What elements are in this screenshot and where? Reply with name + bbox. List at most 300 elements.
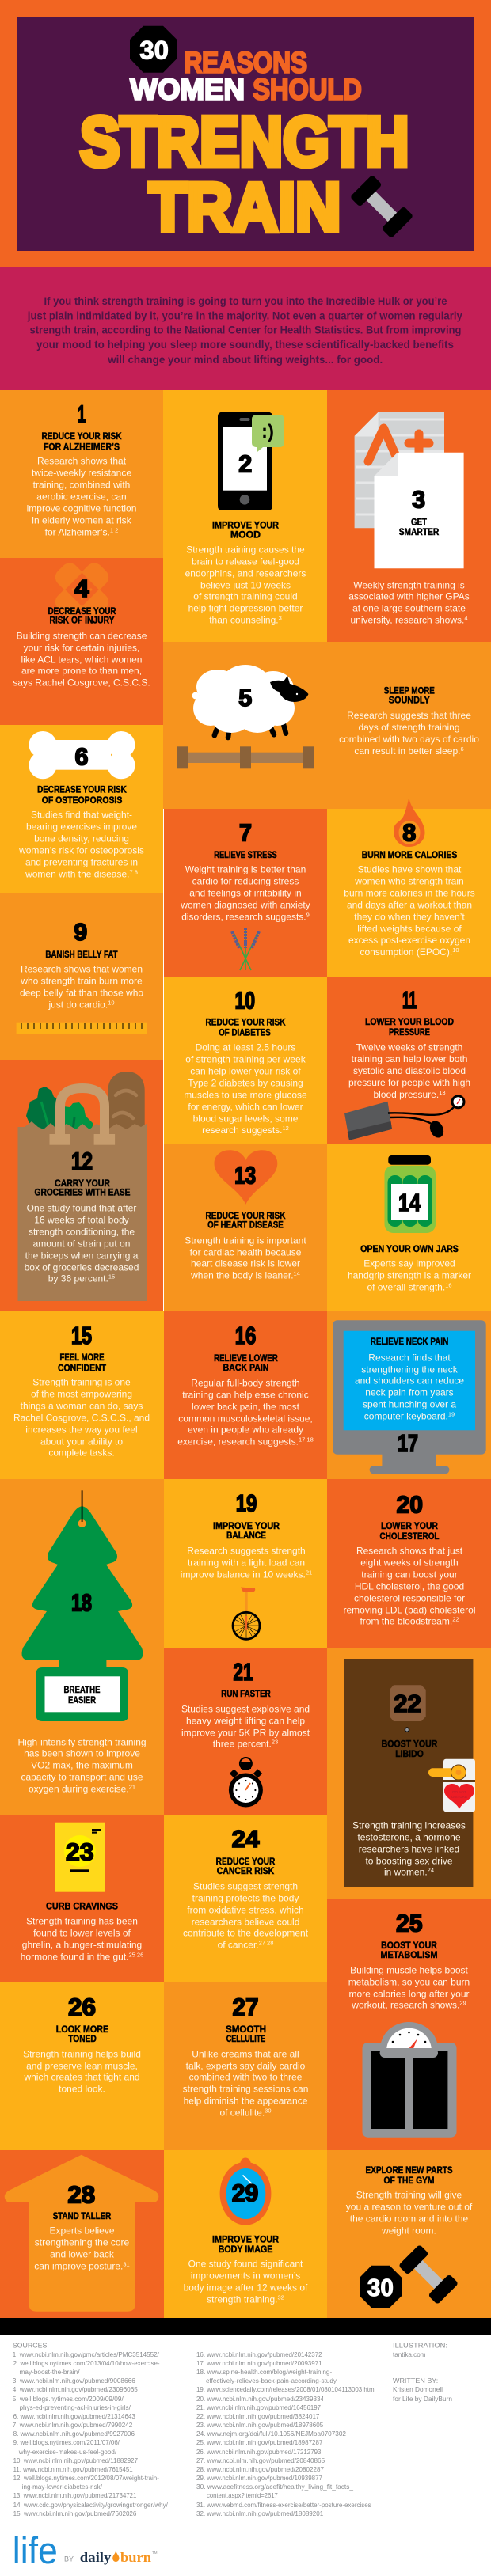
body text: Research suggests that three — [347, 710, 471, 721]
heading: LIBIDO — [395, 1748, 424, 1759]
heading: DECREASE YOUR RISK — [37, 784, 127, 795]
heading — [226, 2024, 266, 2044]
body text: 19 — [448, 1411, 455, 1418]
panel: 15 confident — [0, 1311, 164, 1479]
icon: A+ paper — [355, 412, 464, 568]
body text — [13, 631, 150, 689]
panel: 23 cravings — [0, 1815, 164, 1982]
icon: tree air freshener — [22, 1490, 143, 1721]
body text: more calories long after your — [348, 1989, 470, 2000]
heading — [212, 519, 279, 540]
heading — [37, 784, 127, 806]
sources: column 2 — [196, 2350, 375, 2517]
body text: Research shows that — [37, 456, 127, 467]
body text: burn more calories in the hours — [344, 888, 475, 899]
sources: column 2: 27. www.ncbi.nlm.nih.gov/pubmed/20840865 — [196, 2456, 325, 2464]
body text — [183, 2049, 308, 2119]
sources: column 2: 22. www.ncbi.nlm.nih.gov/pubmed/3824017 — [196, 2412, 320, 2420]
body text: Studies suggest strength — [193, 1881, 298, 1892]
body text: things a woman can do, says — [21, 1401, 143, 1412]
panel: 25 metabolism — [327, 1899, 491, 2150]
sources: column 1: may-boost-the-brain/ — [19, 2368, 80, 2376]
body text: bearing exercises improve — [26, 821, 137, 833]
heading: REDUCE YOUR — [216, 1856, 276, 1867]
body text: Doing at least 2.5 hours — [196, 1042, 295, 1053]
heading: BALANCE — [226, 1530, 266, 1541]
sources: column 2: 29. www.ncbi.nlm.nih.gov/pubmed/10939877 — [196, 2474, 322, 2482]
number 25: 25 — [396, 1910, 423, 1937]
credits: ILLUSTRATION: — [393, 2342, 447, 2350]
body text: Studies find that weight- — [31, 810, 132, 821]
heading: OF THE GYM — [383, 2175, 434, 2186]
body text: Strength training causes the — [186, 544, 305, 556]
sources: column 2: 18. www.spine-health.com/blog/weight-training- — [196, 2368, 332, 2376]
number 15: 15 — [71, 1322, 92, 1349]
body text: at one large southern state — [352, 603, 466, 614]
body text: Strength training has been — [26, 1916, 138, 1927]
title: STRENGTH — [80, 102, 409, 180]
sources: column 1: 11. www.ncbi.nlm.nih.gov/pubmed/7615451 — [13, 2465, 133, 2473]
sources: column 1: why-exercise-makes-us-feel-good/ — [18, 2448, 117, 2456]
body text: aerobic exercise, can — [36, 491, 127, 503]
body text: eight weeks of strength — [360, 1557, 459, 1569]
body text: and days after a workout than — [347, 900, 472, 911]
heading: BACK PAIN — [223, 1362, 268, 1373]
number 13: 13 — [234, 1162, 256, 1189]
body text: 31 — [123, 2261, 130, 2268]
heading: REDUCE YOUR RISK — [41, 431, 122, 442]
heading: DECREASE YOUR — [48, 605, 116, 616]
body text: computer keyboard. — [364, 1411, 448, 1422]
heading: CELLULITE — [226, 2033, 265, 2044]
logo: life by daily burn: BY — [64, 2555, 74, 2563]
body text: lower back pain, the most — [192, 1402, 300, 1413]
body text: disorders, research suggests. — [181, 912, 306, 923]
heading: BOOST YOUR — [382, 1739, 438, 1750]
body text: 30 — [265, 2107, 272, 2115]
body text: 6 — [460, 745, 464, 753]
icon: 30 weight plate: 30 — [139, 36, 169, 65]
body text: 13 — [439, 1089, 446, 1096]
panel: 18 breathe — [0, 1479, 164, 1815]
body text: and shoulders can reduce — [355, 1375, 464, 1387]
heading — [380, 1520, 439, 1542]
number 21: 21 — [233, 1658, 253, 1686]
sources: column 1: 12. well.blogs.nytimes.com/2012/08/07/weight-train- — [13, 2474, 159, 2482]
number 1: 1 — [78, 400, 86, 427]
body text: training can boost your — [361, 1569, 458, 1580]
sources: column 1: 5. well.blogs.nytimes.com/2009/09/09/ — [13, 2395, 124, 2403]
logo: life by daily burn: burn — [120, 2550, 152, 2565]
body text: Twelve weeks of strength — [356, 1042, 462, 1053]
body text: heart disease risk is lower — [191, 1258, 300, 1269]
panel: 30 explore — [327, 2150, 491, 2318]
body text — [23, 2049, 141, 2095]
heading — [56, 2024, 108, 2044]
heading — [366, 2164, 453, 2186]
body text: Research suggests strength — [187, 1546, 306, 1557]
body text: women diagnosed with anxiety — [180, 900, 310, 911]
body text: in elderly women at risk — [32, 515, 132, 526]
sources: column 1 — [13, 2342, 168, 2517]
credits: WRITTEN BY: — [393, 2377, 438, 2384]
body text — [348, 580, 470, 626]
body text: workout, research shows. — [352, 2000, 459, 2011]
sources: column 1: 4. www.ncbi.nlm.nih.gov/pubmed/23096065 — [13, 2385, 138, 2393]
body text: twice-weekly resistance — [32, 468, 131, 479]
body text — [348, 1042, 470, 1100]
sources: column 1: 3. www.ncbi.nlm.nih.gov/pubmed/9008666 — [13, 2377, 135, 2384]
heading: RELIEVE STRESS — [214, 849, 277, 860]
panel: 12 groceries — [0, 1060, 163, 1311]
icon: door: DO NOT — [452, 1790, 466, 1794]
icon: door: DISTURB — [451, 1795, 467, 1799]
number 19: 19 — [236, 1489, 257, 1517]
sources: column 2: 28. www.ncbi.nlm.nih.gov/pubmed/20802287 — [196, 2465, 324, 2473]
panel: 14 jars — [327, 1144, 491, 1311]
body text: like ACL tears, which women — [21, 654, 142, 666]
body text: by 36 percent. — [48, 1273, 108, 1284]
body text: of strength training per week — [185, 1054, 306, 1065]
icon: 30 weight plate: 30 — [367, 2274, 394, 2301]
panel: 7 stress — [164, 809, 327, 977]
body text: neck pain from years — [365, 1387, 454, 1398]
body text: the biceps when carrying a — [25, 1250, 139, 1261]
number 9: 9 — [74, 918, 87, 946]
heading: CURB CRAVINGS — [46, 1901, 118, 1912]
icon: blood pressure cuff — [344, 1095, 466, 1140]
number 14: 14 — [398, 1189, 421, 1216]
icon: pickle jar — [385, 1155, 436, 1233]
panel: 8 calories — [327, 797, 491, 977]
heading: PRESSURE — [389, 1026, 430, 1038]
intro text: will change your mind about lifting weights... for good. — [107, 353, 383, 366]
heading — [63, 1684, 100, 1705]
body text: Unlike creams that are all — [192, 2049, 299, 2060]
panel: 9 belly fat — [0, 893, 163, 1060]
heading: MOOD — [230, 529, 261, 540]
heading: RELIEVE LOWER — [214, 1352, 278, 1364]
body text: deep belly fat than those who — [20, 988, 143, 999]
body text: when the body is leaner. — [191, 1270, 294, 1281]
heading: BURN MORE CALORIES — [362, 849, 457, 860]
credits — [393, 2342, 452, 2403]
body text: Research finds that — [368, 1352, 451, 1364]
intro text — [27, 294, 462, 366]
body text: 10 — [108, 1000, 115, 1007]
sources: column 2: 25. www.ncbi.nlm.nih.gov/pubmed/18987287 — [196, 2438, 323, 2446]
body text: can improve posture. — [34, 2261, 123, 2272]
heading — [48, 605, 116, 626]
sources: column 1: 6. www.ncbi.nlm.nih.gov/pubmed/21314643 — [13, 2412, 135, 2420]
body text: excess post-exercise oxygen — [348, 935, 470, 946]
number 16: 16 — [235, 1322, 256, 1349]
sources: column 2: 17. www.ncbi.nlm.nih.gov/pubmed/20093971 — [196, 2359, 322, 2367]
body text: and preserve lean muscle, — [26, 2061, 138, 2072]
icon: dumbbell — [350, 175, 413, 238]
heading: OF DIABETES — [219, 1027, 271, 1038]
panel: 6 osteoporosis — [0, 725, 163, 893]
body text: training, combined with — [33, 480, 130, 491]
intro panel — [0, 267, 491, 390]
footer band — [0, 2318, 491, 2335]
body text: bone density, reducing — [34, 833, 129, 844]
body text: Studies have shown that — [358, 864, 462, 875]
body text: combined with two to three — [189, 2072, 303, 2083]
body text — [13, 1377, 150, 1459]
logo: life by daily burn: life — [13, 2529, 58, 2571]
heading: FEEL MORE — [60, 1352, 105, 1363]
sources: column 2: 24. www.nejm.org/doi/full/10.1056/NEJMoa0707302 — [196, 2430, 346, 2438]
heading — [365, 1016, 454, 1038]
body text: 17 18 — [299, 1436, 314, 1444]
body text: exercise, research suggests. — [177, 1436, 299, 1447]
number 5: 5 — [238, 684, 252, 711]
sources: column 1: SOURCES: — [13, 2342, 49, 2350]
heading: GET — [411, 516, 428, 527]
heading: OF HEART DISEASE — [207, 1220, 284, 1231]
body text: are more prone to than men, — [21, 666, 142, 677]
body text: Strength training is one — [32, 1377, 131, 1388]
heading: CHOLESTEROL — [380, 1531, 439, 1542]
body text: complete tasks. — [48, 1447, 115, 1459]
body text: toned look. — [59, 2084, 105, 2095]
body text: strengthening the neck — [361, 1364, 459, 1375]
body text: from the bloodstream. — [360, 1616, 452, 1627]
sources: column 1: 8. www.ncbi.nlm.nih.gov/pubmed/9927006 — [13, 2430, 135, 2438]
body text — [344, 864, 475, 958]
body text: spent hunching over a — [363, 1399, 456, 1410]
heading: SMARTER — [399, 526, 440, 537]
panel: 3 smarter — [327, 390, 491, 642]
title — [80, 46, 409, 245]
body text: associated with higher GPAs — [348, 591, 470, 602]
body text: women with the disease. — [25, 869, 129, 880]
body text: 21 — [306, 1569, 312, 1576]
body text: improve cognitive function — [27, 503, 136, 514]
number 22: 22 — [394, 1690, 421, 1717]
body text: found to lower levels of — [33, 1928, 131, 1939]
body text: VO2 max, the maximum — [31, 1760, 133, 1771]
panel: 19 balance — [164, 1479, 327, 1648]
body text: and feelings of irritability in — [189, 888, 302, 899]
body text: improvements in women’s — [191, 2271, 300, 2282]
sources: column 2: 16. www.ncbi.nlm.nih.gov/pubmed/20142372 — [196, 2350, 322, 2358]
body text: hormone found in the gut. — [21, 1952, 128, 1963]
panel: 26 toned — [0, 1982, 164, 2150]
body text: 15 — [108, 1273, 115, 1280]
body text — [355, 1352, 464, 1422]
body text: 24 — [428, 1867, 434, 1874]
title: WOMEN — [130, 73, 245, 106]
body text: they do when they haven’t — [354, 912, 465, 923]
logo: life by daily burn: TM — [152, 2551, 158, 2555]
sources: column 1: 15. www.ncbi.nlm.nih.gov/pubmed/7602026 — [13, 2510, 137, 2517]
number 4: 4 — [74, 575, 89, 602]
body text: One study found significant — [188, 2259, 303, 2270]
body text: research suggests. — [202, 1125, 283, 1136]
icon: lavender — [232, 928, 259, 970]
heading — [206, 1017, 286, 1038]
body text: for cardiac health because — [190, 1247, 302, 1258]
icon: ruler — [17, 1023, 147, 1034]
body text: 10 — [452, 947, 459, 954]
heading — [380, 1940, 437, 1960]
body text: 29 — [459, 2000, 466, 2007]
body text: training can help lower both — [352, 1053, 467, 1064]
body text: metabolism, so you can burn — [348, 1977, 470, 1988]
body text: of cancer. — [218, 1940, 259, 1951]
logo: life by daily burn — [13, 2529, 158, 2571]
sources: column 2: 23. www.ncbi.nlm.nih.gov/pubmed/18978605 — [196, 2421, 323, 2429]
body text: Regular full-body strength — [191, 1378, 300, 1389]
body text: help fight depression better — [188, 603, 303, 614]
body text: days of strength training — [358, 722, 460, 733]
sources: column 1: phys-ed-preventing-acl-injuries-in-girls/ — [19, 2403, 131, 2411]
panel: 27 cellulite — [164, 1982, 327, 2150]
body text: which creates that tight and — [23, 2072, 140, 2083]
body text — [185, 544, 306, 626]
heading — [214, 1352, 278, 1373]
logo: life by daily burn: daily — [80, 2550, 112, 2565]
body text: can help lower your risk of — [190, 1066, 301, 1077]
panel: 24 cancer — [164, 1815, 327, 1982]
heading: FOR ALZHEIMER’S — [44, 441, 120, 452]
body text: in women. — [384, 1867, 428, 1878]
body text: 7 8 — [129, 869, 138, 876]
panel: 22 libido — [327, 1648, 491, 1899]
icon: door — [344, 1659, 475, 1887]
sources: column 2: 19. www.sciencedaily.com/releases/2008/01/080104113003.htm — [196, 2385, 375, 2393]
heading: IMPROVE YOUR — [213, 1520, 280, 1531]
number 6: 6 — [74, 743, 89, 771]
panel: 17 neck pain — [327, 1311, 491, 1479]
body text: from oxidative stress, which — [187, 1905, 304, 1916]
sources: column 1: 9. well.blogs.nytimes.com/2011/07/06/ — [13, 2438, 120, 2446]
heading: REDUCE YOUR RISK — [206, 1017, 286, 1028]
heading: SMOOTH — [226, 2024, 266, 2035]
body text: handgrip strength is a marker — [348, 1270, 471, 1281]
heading: RUN FASTER — [221, 1688, 271, 1699]
panel: 11 blood pressure — [327, 977, 491, 1144]
body text: One study found that after — [27, 1203, 136, 1214]
body text: 4 — [464, 615, 468, 622]
body text: women who strength train — [354, 876, 464, 887]
number 27: 27 — [233, 1994, 258, 2021]
number 29: 29 — [232, 2180, 258, 2207]
sources: column 1: 7. www.ncbi.nlm.nih.gov/pubmed/7990242 — [13, 2421, 132, 2429]
body text: university, research shows. — [350, 615, 464, 626]
body text — [348, 1965, 470, 2011]
icon: bone — [29, 731, 135, 779]
body text: cardio for reducing stress — [192, 876, 299, 887]
icon: sheep over fence — [177, 665, 314, 768]
body text: heavy weight lifting can help — [186, 1716, 305, 1727]
body text: researchers believe could — [192, 1917, 299, 1928]
body text: Type 2 diabetes by causing — [188, 1078, 303, 1089]
body text: Studies suggest explosive and — [181, 1704, 310, 1715]
heading: SOUNDLY — [389, 695, 430, 706]
body text — [20, 964, 143, 1011]
body text: ghrelin, a hunger-stimulating — [22, 1940, 142, 1951]
body text: improve your 5K PR by almost — [181, 1728, 310, 1739]
icon: grocery bag — [17, 1072, 147, 1301]
body text: training protects the body — [192, 1893, 299, 1904]
heading: CANCER RISK — [217, 1865, 274, 1876]
heading: LOOK MORE — [56, 2024, 108, 2035]
number 23: 23 — [66, 1838, 94, 1866]
heading — [206, 1210, 286, 1231]
panel: 2 mood — [163, 390, 327, 642]
sources: column 2: 20. www.ncbi.nlm.nih.gov/pubmed/23439334 — [196, 2395, 324, 2403]
heading — [35, 1178, 130, 1198]
body text: increases the way you feel — [25, 1425, 138, 1436]
icon: 30 weight plate — [130, 26, 177, 73]
panel: 16 back pain — [164, 1311, 327, 1479]
sources: column 1: 13. www.ncbi.nlm.nih.gov/pubmed/21734721 — [13, 2491, 137, 2499]
panel: 10 diabetes — [164, 977, 327, 1144]
body text: the cardio room and into the — [350, 2214, 469, 2225]
body text: help diminish the appearance — [184, 2096, 308, 2107]
body text: Research shows that just — [356, 1546, 463, 1557]
body text: 16 weeks of total body — [34, 1215, 129, 1226]
body text: 9 — [306, 912, 310, 919]
sources: column 1: 1. www.ncbi.nlm.nih.gov/pmc/articles/PMC3514552/ — [13, 2350, 159, 2358]
body text: combined with two days of cardio — [339, 734, 479, 745]
body text: High-intensity strength training — [17, 1737, 147, 1748]
heading: IMPROVE YOUR — [212, 519, 279, 530]
body text: capacity to transport and use — [21, 1772, 143, 1783]
sources: column 1: 2. well.blogs.nytimes.com/2013/04/10/how-exercise- — [13, 2359, 160, 2367]
body text: Strength training will give — [356, 2190, 462, 2201]
body text: Experts believe — [49, 2225, 115, 2236]
number 10: 10 — [234, 987, 255, 1015]
icon: mirror — [220, 2157, 271, 2225]
body text — [181, 1546, 312, 1580]
heading: REDUCE YOUR RISK — [206, 1210, 286, 1221]
body text — [181, 1704, 310, 1750]
heading: BOOST YOUR — [381, 1940, 437, 1951]
body text: you a reason to venture out of — [346, 2202, 473, 2213]
body text — [352, 1820, 466, 1878]
body text — [339, 710, 479, 757]
heading — [213, 1520, 280, 1541]
body text: consumption (EPOC). — [360, 947, 452, 958]
number 28: 28 — [67, 2180, 95, 2208]
panel: 29 body image — [164, 2150, 327, 2318]
sources: column 1: 14. www.cdc.gov/physicalactivity/growingstronger/why/ — [13, 2501, 168, 2509]
body text — [183, 1881, 309, 1951]
heading — [399, 516, 440, 537]
title: SHOULD — [253, 73, 362, 106]
credits: Kristen Domonell — [393, 2385, 443, 2393]
heading: CARRY YOUR — [55, 1178, 110, 1189]
body text — [18, 810, 144, 880]
body text: talk, experts say daily cardio — [186, 2061, 306, 2072]
panel: 5 sleep — [163, 642, 491, 809]
body text: Rachel Cosgrove, C.S.C.S., and — [13, 1413, 150, 1424]
body text — [27, 456, 136, 538]
body text: box of groceries decreased — [25, 1262, 139, 1273]
panel: 4 injury — [0, 547, 163, 725]
body text: training can help ease chronic — [182, 1390, 309, 1401]
body text: body image after 12 weeks of — [184, 2282, 308, 2293]
number 3: 3 — [412, 486, 425, 514]
icon: phone — [218, 412, 284, 510]
body text: 27 28 — [259, 1940, 273, 1947]
body text: systolic and diastolic blood — [353, 1065, 466, 1076]
heading: RISK OF INJURY — [49, 615, 114, 626]
